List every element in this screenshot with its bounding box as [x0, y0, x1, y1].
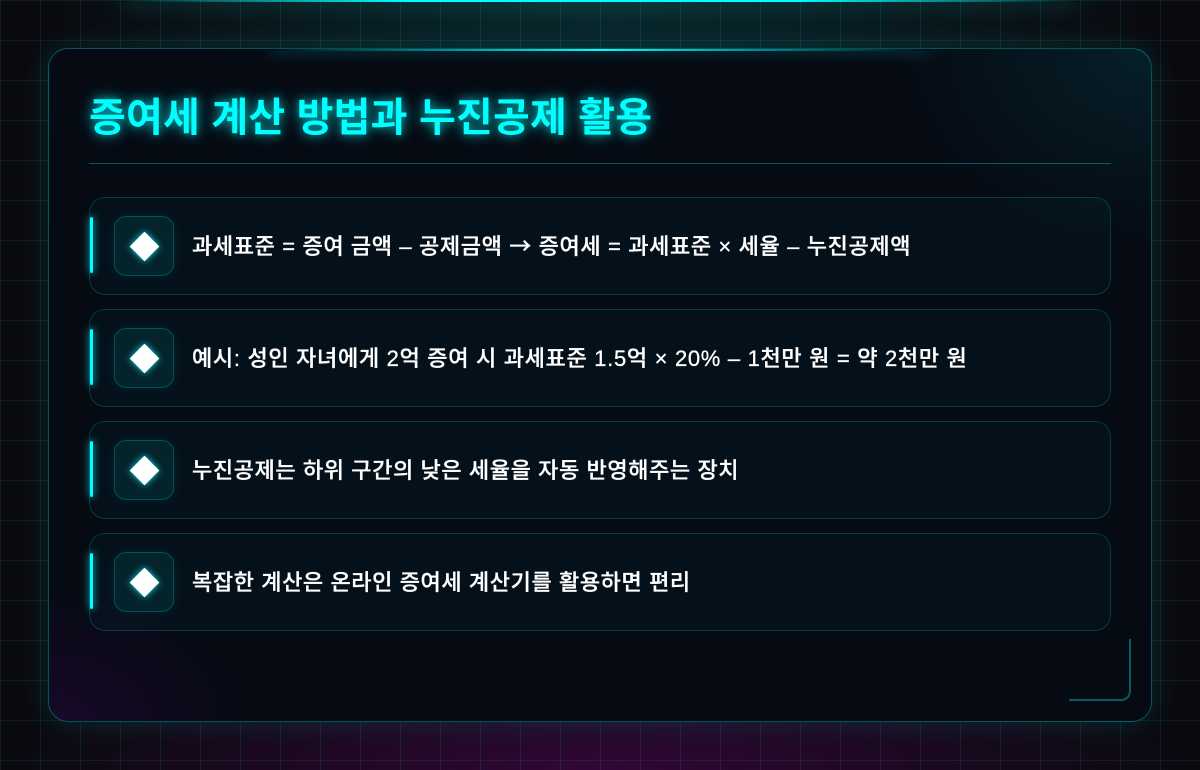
- list item 2: [89, 309, 1111, 407]
- list item 4: [89, 533, 1111, 631]
- accent bar 3: [90, 441, 93, 497]
- card top glow line: [269, 49, 931, 51]
- list item 1: [89, 197, 1111, 295]
- top glow bar: [120, 0, 1080, 2]
- text: example: 예시: 성인 자녀에게 2억 증여 시 과세표준 1.5억 × 20% – 1천만 원 = 약 2천만 원: [192, 346, 968, 371]
- title: 증여세 계산 방법과 누진공제 활용: [89, 96, 652, 140]
- icon: diamond 3: [114, 440, 174, 500]
- icon: diamond 4: [114, 552, 174, 612]
- accent bar 1: [90, 217, 93, 273]
- icon: diamond 2: [114, 328, 174, 388]
- text: calculator tip: 복잡한 계산은 온라인 증여세 계산기를 활용하면 편리: [192, 570, 691, 595]
- accent bar 2: [90, 329, 93, 385]
- list item 3: [89, 421, 1111, 519]
- text: progressive deduction: 누진공제는 하위 구간의 낮은 세율을 자동 반영해주는 장치: [192, 458, 739, 483]
- accent bar 4: [90, 553, 93, 609]
- corner bracket: [1069, 639, 1131, 701]
- icon: diamond 1: [114, 216, 174, 276]
- text: formula: 과세표준 = 증여 금액 – 공제금액 → 증여세 = 과세표준 × 세율 – 누진공제액: [192, 229, 911, 261]
